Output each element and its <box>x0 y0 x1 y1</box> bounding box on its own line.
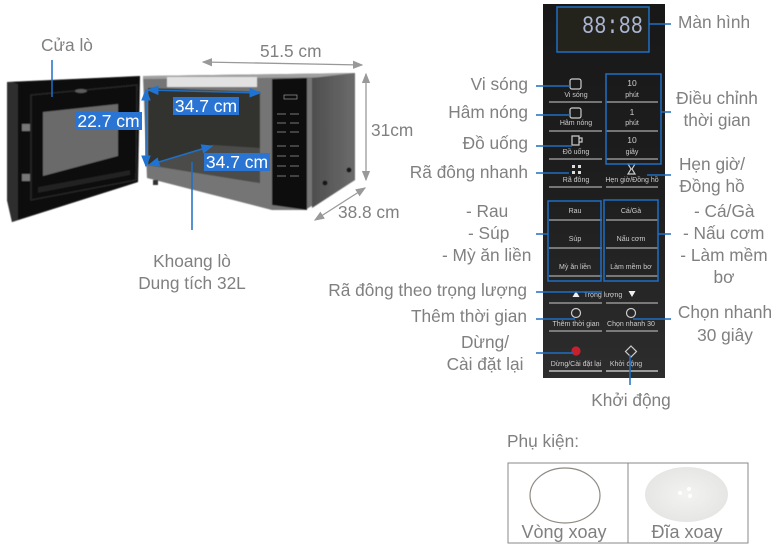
panel background <box>543 4 665 378</box>
accessories heading: Phụ kiện: <box>507 431 579 451</box>
left-side labels: Rã đông theo trọng lượng <box>328 280 527 300</box>
badge: inner depth: 34.7 cm <box>206 152 268 172</box>
door mesh window <box>43 104 118 176</box>
button labels: 10 <box>627 135 637 145</box>
right-side labels: Chọn nhanh <box>678 302 772 322</box>
door vent <box>38 170 130 193</box>
button labels: Mỳ ăn liền <box>559 262 591 271</box>
button labels: Rã đông <box>563 177 589 184</box>
left-side labels: - Rau <box>466 201 508 221</box>
button labels <box>551 78 659 368</box>
plate image <box>645 467 728 522</box>
cavity back wall <box>148 88 260 183</box>
button labels: phút <box>625 92 639 99</box>
right-side labels: - Nấu cơm <box>683 223 764 243</box>
door leader <box>51 60 53 97</box>
highlight: right menu <box>604 200 658 281</box>
side panel <box>312 73 355 208</box>
left-side labels: Hâm nóng <box>448 102 528 122</box>
left-side labels: - Súp <box>468 223 509 243</box>
button icons <box>570 79 636 357</box>
control panel on body <box>272 78 307 210</box>
label: cavity capacity: Khoang lò <box>153 251 231 271</box>
width arrow <box>203 62 362 65</box>
left-side labels: Cài đặt lại <box>447 354 523 374</box>
cavity floor <box>148 145 260 183</box>
button labels: Súp <box>569 236 581 243</box>
left-side labels <box>328 74 531 374</box>
sticker <box>167 77 257 87</box>
button labels: Làm mềm bơ <box>610 262 652 271</box>
button labels: Khởi động <box>610 360 642 368</box>
height label: 31cm <box>371 120 413 140</box>
width label: 51.5 cm <box>260 41 321 61</box>
button labels: Hẹn giờ/Đồng hồ <box>605 175 659 184</box>
button labels: 1 <box>630 107 635 117</box>
label: cavity capacity: Dung tích 32L <box>138 273 246 293</box>
ring image <box>530 468 600 523</box>
highlight: time buttons <box>606 74 661 164</box>
depth arrow <box>315 188 365 220</box>
button labels: Hâm nóng <box>560 120 592 127</box>
depth label: 38.8 cm <box>338 202 399 222</box>
height arrow <box>365 74 367 180</box>
foot and side screws <box>153 180 158 185</box>
left-side labels: Rã đông nhanh <box>410 162 528 182</box>
display: 88:88 <box>582 12 643 41</box>
control panel <box>543 4 665 378</box>
door outer <box>7 76 140 222</box>
cavity leader <box>191 162 193 230</box>
button labels: Đồ uống <box>563 147 589 156</box>
button labels: Vi sóng <box>564 92 588 99</box>
label: door: Cửa lò <box>41 35 93 55</box>
badge: inner height: 22.7 cm <box>77 111 140 131</box>
button labels: phút <box>625 120 639 127</box>
inner depth arrow <box>149 146 212 165</box>
display <box>557 7 649 52</box>
button labels: Rau <box>569 208 582 215</box>
accessories box <box>508 463 748 543</box>
right-side labels <box>676 12 772 345</box>
right-side labels: thời gian <box>683 110 751 130</box>
button labels: Chọn nhanh 30 <box>607 321 655 328</box>
left-side labels: Dừng/ <box>461 332 509 352</box>
microwave body front frame <box>143 73 355 210</box>
right-side labels: Màn hình <box>678 12 750 32</box>
right-side labels: 30 giây <box>697 325 753 345</box>
button labels: Cá/Gà <box>621 208 641 215</box>
highlight: left menu <box>548 201 601 281</box>
right-side labels: Điều chỉnh <box>676 88 758 108</box>
top edge <box>143 73 355 79</box>
plate label: Đĩa xoay <box>651 522 723 542</box>
button labels: Nấu cơm <box>617 234 646 243</box>
inner width arrow <box>148 90 260 93</box>
button labels: giây <box>626 149 639 156</box>
door latches <box>22 124 30 181</box>
right-side labels: bơ <box>714 267 734 287</box>
button labels: 10 <box>627 78 637 88</box>
microwave photo <box>7 73 355 222</box>
left-side labels: Đồ uống <box>463 133 528 153</box>
left-side labels: - Mỳ ăn liền <box>442 245 531 265</box>
ring label: Vòng xoay <box>521 522 607 542</box>
right-side labels: - Làm mềm <box>680 245 768 265</box>
badge: inner width: 34.7 cm <box>175 96 237 116</box>
button labels: Thêm thời gian <box>552 321 600 328</box>
right-side labels: Hẹn giờ/ <box>679 154 745 174</box>
leader lines <box>536 24 671 385</box>
body panel mini buttons <box>277 95 299 176</box>
weight arrows <box>572 291 636 297</box>
button divider lines <box>549 102 658 371</box>
label: cavity capacity <box>138 251 246 293</box>
left-side labels: Thêm thời gian <box>411 306 527 326</box>
left-side labels: Vi sóng <box>471 74 528 94</box>
door lamp <box>75 89 87 93</box>
label: start: Khởi động <box>591 390 671 410</box>
button labels: Dừng/Cài đặt lại <box>551 361 602 368</box>
inner height arrow <box>145 90 147 166</box>
door inner frame <box>31 85 137 200</box>
right-side labels: - Cá/Gà <box>694 201 755 221</box>
right-side labels: Đồng hồ <box>679 176 745 196</box>
door edge <box>7 82 18 222</box>
button labels: Trọng lượng <box>584 292 622 299</box>
